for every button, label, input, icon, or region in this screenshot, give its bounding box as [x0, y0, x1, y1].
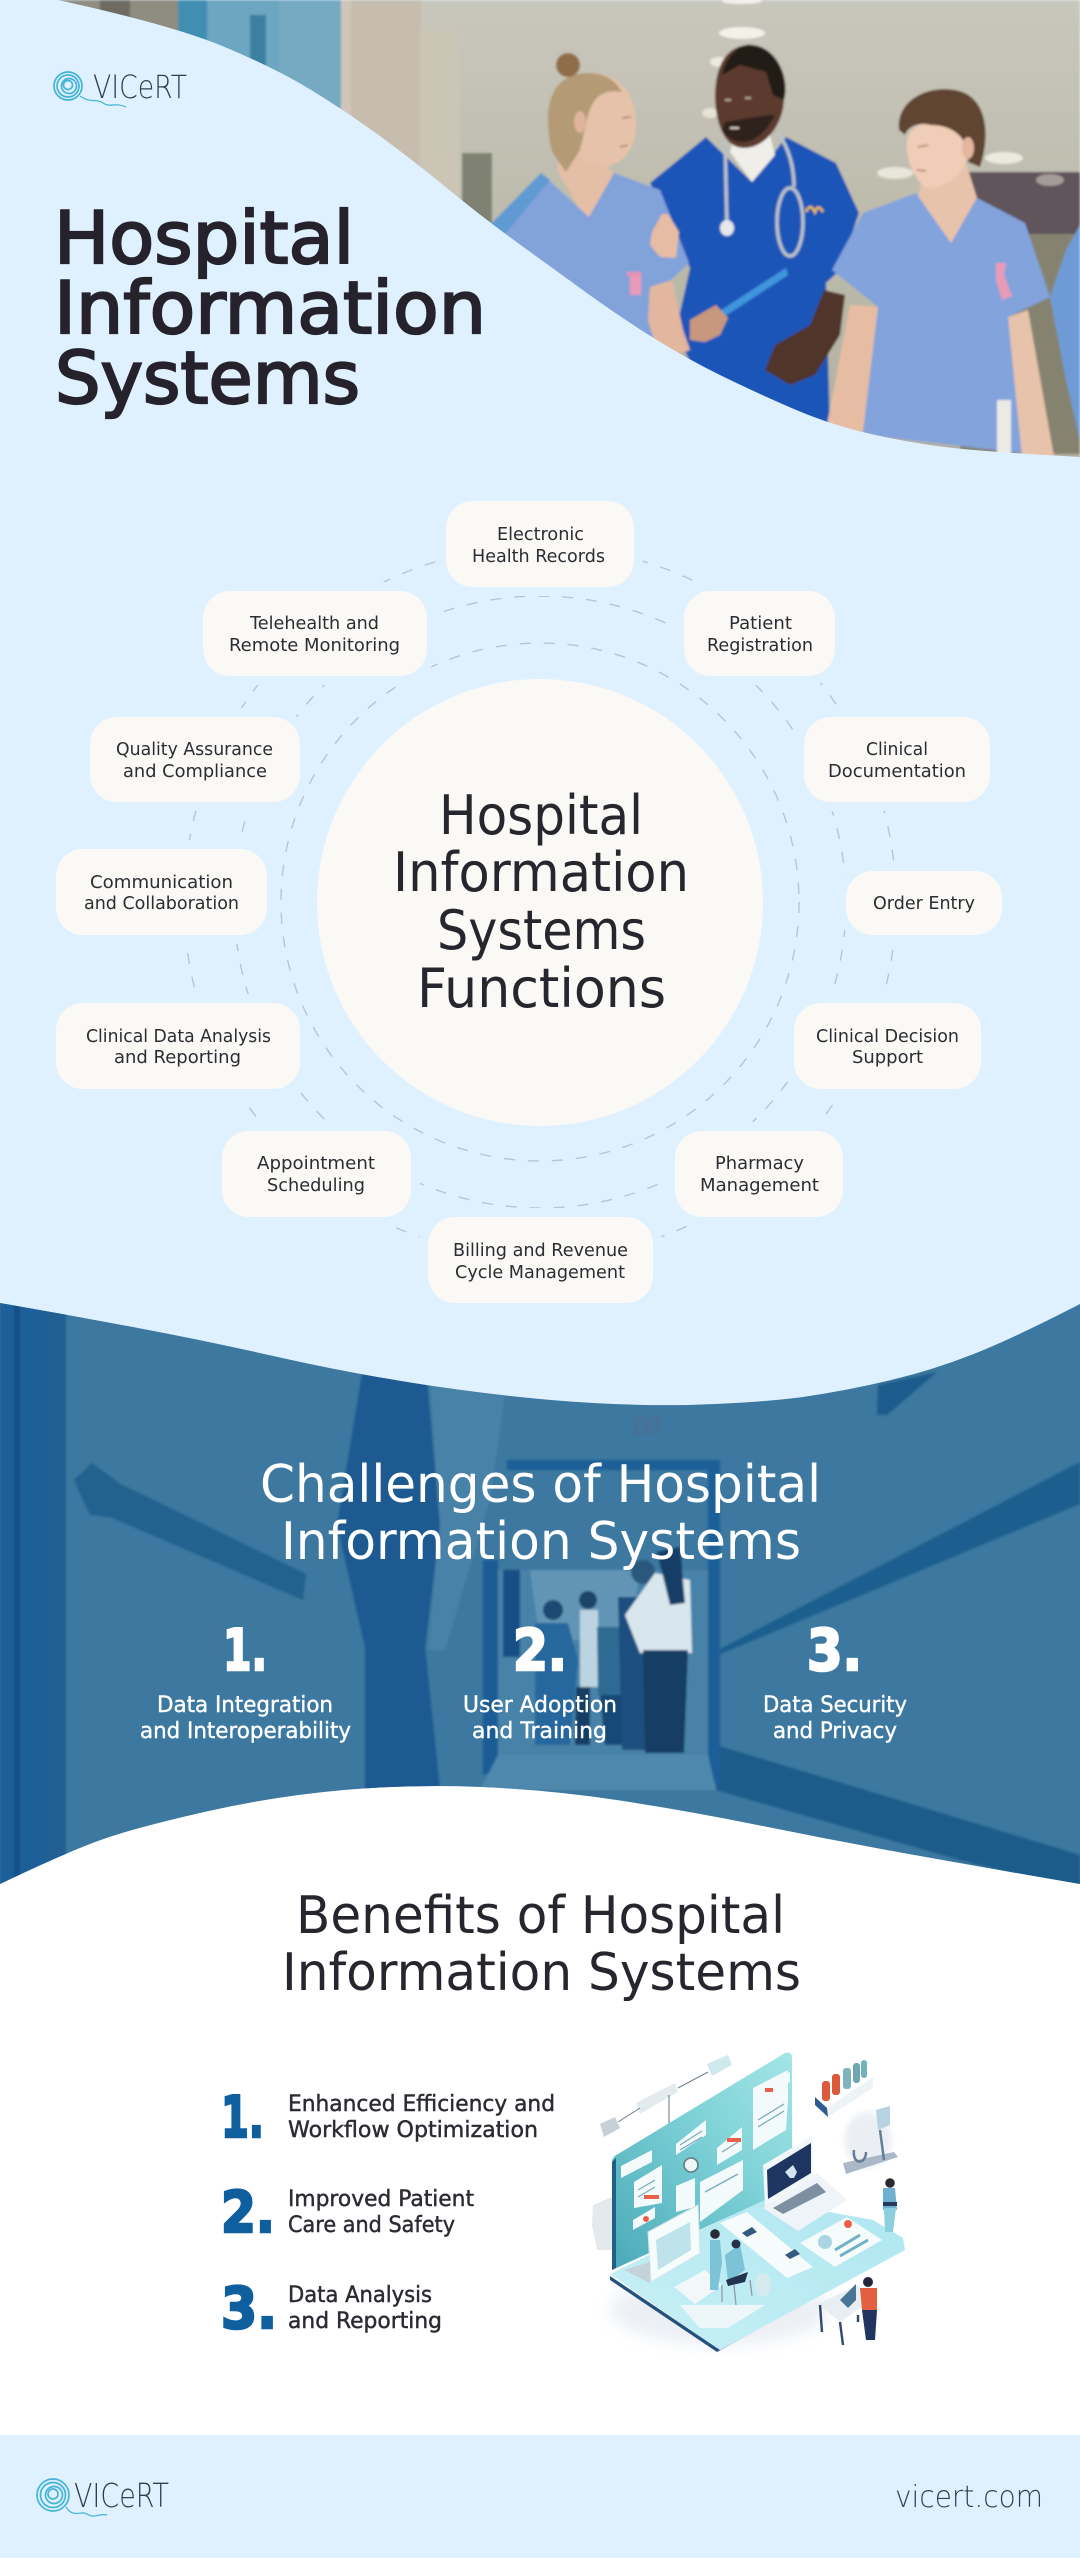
pill: Quality Assurance and Compliance: and Compliance — [123, 761, 267, 782]
shelf with bottles — [815, 2060, 873, 2117]
pill: Clinical Documentation: Documentation — [828, 761, 966, 782]
benefits heading: Information Systems — [282, 1943, 801, 2003]
ceiling rods — [600, 2055, 732, 2170]
wall frame top right — [877, 1372, 937, 1415]
benefit 3: Data Analysis — [288, 2283, 432, 2308]
icon: spiral — [37, 2479, 107, 2516]
left handrail — [74, 1463, 306, 1600]
heading: Challenges of Hospital — [260, 1455, 821, 1515]
board panels — [621, 2070, 790, 2230]
door frame strip at left — [0, 1303, 47, 1884]
right handrail — [716, 1462, 1080, 1656]
person at desk — [818, 2277, 877, 2345]
pill: Communication and Collaboration — [56, 849, 267, 935]
corridor people — [535, 1623, 578, 1745]
center circle: Information — [393, 841, 689, 904]
tablet and hand — [720, 268, 789, 316]
pill: Clinical Documentation: Clinical — [866, 739, 928, 760]
logo: header Vicert — [54, 68, 187, 107]
equipment — [843, 2106, 898, 2174]
document panel — [624, 2205, 700, 2283]
website url: vicert.com — [895, 2480, 1043, 2515]
diagram: hospital information systems functions — [56, 501, 1002, 1303]
challenge 1: 1. — [223, 1618, 267, 1684]
pill: Patient Registration: Registration — [707, 635, 813, 656]
pill: Clinical Data Analysis and Reporting — [56, 1003, 300, 1089]
ceiling lights — [719, 27, 765, 39]
pill: Telehealth and Remote Monitoring — [203, 591, 427, 676]
challenge 2 — [463, 1618, 617, 1744]
logo: footer Vicert — [37, 2476, 169, 2516]
benefit 1: Workflow Optimization — [288, 2118, 538, 2143]
pill: Appointment Scheduling — [222, 1131, 411, 1217]
challenge 2: and Training — [472, 1719, 607, 1744]
pill: Clinical Decision Support: Clinical Decision — [816, 1026, 959, 1047]
pill: Clinical Decision Support — [794, 1003, 981, 1089]
logo: header Vicert: VICeRT — [93, 68, 187, 106]
dashed orbit rings — [184, 546, 896, 1258]
challenge 1: Data Integration — [157, 1693, 333, 1718]
logo: footer Vicert: VICeRT — [74, 2476, 169, 2515]
benefit 2: Improved Patient — [288, 2187, 474, 2212]
challenge 3: 3. — [807, 1618, 862, 1684]
left nurse — [556, 154, 614, 218]
corridor interior — [498, 1568, 708, 1754]
pill: Billing and Revenue Cycle Management: Cycle Management — [455, 1262, 625, 1283]
function pills — [56, 501, 1002, 1303]
center circle: Systems — [437, 899, 646, 962]
corridor door frame — [507, 1460, 720, 1785]
lower baseboard right — [716, 1745, 1080, 1890]
people at centre — [710, 2229, 771, 2305]
right nurse — [918, 160, 977, 243]
challenge 3: Data Security — [763, 1693, 907, 1718]
benefits heading: Benefits of Hospital — [296, 1886, 785, 1946]
challenge 1 — [140, 1618, 351, 1744]
challenges section — [140, 1455, 907, 1744]
pill: Electronic Health Records: Health Records — [472, 546, 605, 567]
pill: Appointment Scheduling: Scheduling — [267, 1175, 365, 1196]
chart paper — [800, 2217, 882, 2267]
benefits heading — [282, 1886, 801, 2003]
challenge 2: 2. — [513, 1618, 567, 1684]
pill: Communication and Collaboration: Communication — [90, 872, 233, 893]
center circle — [317, 679, 763, 1126]
floor tiles — [674, 2270, 765, 2328]
back board — [612, 2053, 792, 2270]
center circle: Functions — [417, 957, 666, 1020]
title: Hospital — [54, 196, 354, 280]
pill: Electronic Health Records — [446, 501, 634, 587]
floor slab — [610, 2240, 903, 2352]
pill: Telehealth and Remote Monitoring: Remote Monitoring — [229, 635, 400, 656]
footer — [0, 2435, 1080, 2558]
benefit 3: 3. — [221, 2276, 277, 2342]
pill: Quality Assurance and Compliance — [90, 717, 300, 802]
title: Information — [54, 266, 486, 350]
title — [54, 196, 486, 420]
benefit 2 — [221, 2180, 474, 2246]
background: light blue upper area — [0, 0, 1080, 1420]
challenge 1: and Interoperability — [140, 1719, 351, 1744]
benefit 3 — [221, 2276, 442, 2342]
challenge 3 — [763, 1618, 907, 1744]
pill: Communication and Collaboration: and Collaboration — [84, 893, 239, 914]
pill: Quality Assurance and Compliance: Quality Assurance — [116, 739, 273, 760]
pill: Billing and Revenue Cycle Management — [428, 1217, 653, 1303]
side equipment behind board — [592, 2197, 612, 2250]
benefit 2: 2. — [221, 2180, 275, 2246]
center circle: Hospital — [439, 784, 643, 847]
pill: Pharmacy Management: Management — [700, 1175, 819, 1196]
pill: Patient Registration — [684, 591, 835, 676]
pill: Telehealth and Remote Monitoring: Telehealth and — [249, 613, 379, 634]
title: Systems — [55, 336, 360, 420]
heading: Information Systems — [281, 1512, 801, 1572]
laptop — [763, 2136, 847, 2231]
pill: Electronic Health Records: Electronic — [497, 524, 584, 545]
pill: Pharmacy Management — [675, 1131, 843, 1217]
heading — [260, 1455, 821, 1572]
illustration: isometric medical workspace — [592, 2053, 905, 2352]
challenge 3: and Privacy — [773, 1719, 897, 1744]
benefit 1: 1. — [221, 2085, 264, 2151]
icon: spiral — [54, 72, 126, 107]
person right — [883, 2178, 897, 2232]
clock — [684, 2158, 698, 2172]
exit sign: EXIT — [634, 1415, 662, 1440]
benefit 3: and Reporting — [288, 2309, 442, 2334]
benefit 1 — [221, 2085, 555, 2151]
photo: hospital staff walking — [0, 0, 1080, 460]
pill: Patient Registration: Patient — [729, 613, 792, 634]
paper on floor — [720, 2212, 813, 2278]
center doctor — [650, 137, 859, 430]
pill: Order Entry — [846, 871, 1002, 935]
pill: Billing and Revenue Cycle Management: Billing and Revenue — [453, 1240, 628, 1261]
blurred figure coat — [428, 1380, 505, 1650]
pill: Clinical Data Analysis and Reporting: Clinical Data Analysis — [86, 1026, 271, 1047]
pill: Clinical Data Analysis and Reporting: and Reporting — [114, 1047, 241, 1068]
pill: Order Entry: Order Entry — [873, 893, 975, 914]
photo: blue-tinted hospital corridor — [0, 1280, 1080, 1900]
pill: Pharmacy Management: Pharmacy — [715, 1153, 804, 1174]
challenge 2: User Adoption — [463, 1693, 617, 1718]
pill: Clinical Documentation — [804, 717, 990, 802]
pill: Clinical Decision Support: Support — [852, 1047, 923, 1068]
benefit 2: Care and Safety — [288, 2213, 455, 2238]
pill: Appointment Scheduling: Appointment — [257, 1153, 375, 1174]
benefit 1: Enhanced Efficiency and — [288, 2092, 555, 2117]
far right person — [1050, 225, 1080, 440]
